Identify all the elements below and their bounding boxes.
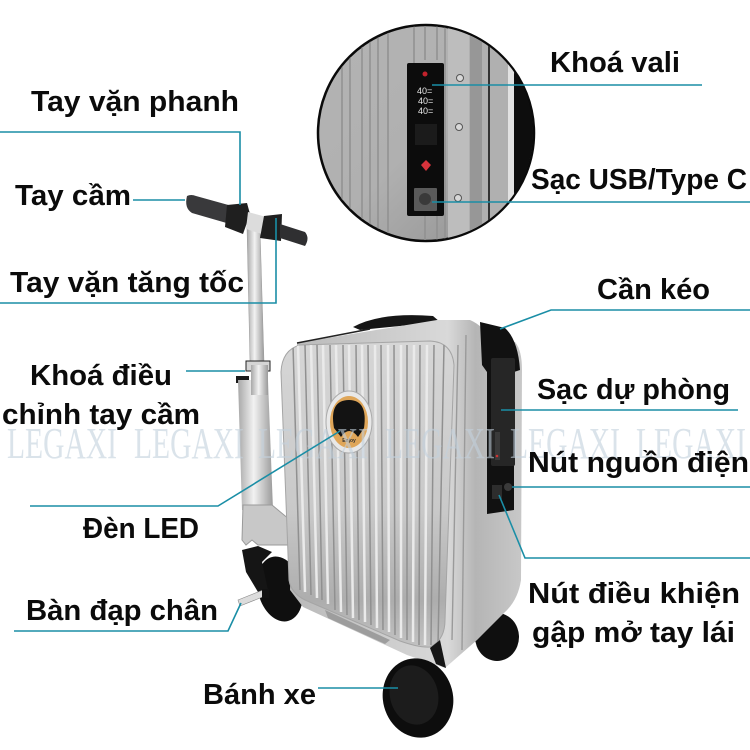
label: Khoá vali: Khoá vali (550, 47, 680, 79)
label: Sạc dự phòng: Sạc dự phòng (537, 374, 730, 406)
label: Bánh xe: Bánh xe (203, 679, 316, 711)
inset: lock close-up circle (318, 20, 538, 250)
label: Khoá điều chỉnh tay cầm (2, 360, 200, 431)
lock panel: 40= (418, 106, 433, 116)
power bank (491, 358, 515, 466)
label: Cần kéo: Cần kéo (597, 274, 710, 306)
label: Nút điều khiện gập mở tay lái: Nút điều khiện (528, 578, 740, 610)
suitcase top handle (353, 315, 440, 330)
foot pedal (238, 589, 269, 606)
watermark: LEGAXI: LEGAXI (258, 419, 368, 468)
lock panel: 40= (417, 86, 432, 96)
front wheel (374, 640, 462, 746)
luggage tray (325, 610, 390, 644)
label: Tay cầm: Tay cầm (15, 180, 131, 212)
left rear wheel and fender (242, 546, 309, 626)
LED badge: Enjoy (342, 438, 356, 444)
label: Tay vặn phanh: Tay vặn phanh (31, 86, 239, 118)
suitcase (281, 315, 522, 668)
label: Đèn LED: Đèn LED (83, 513, 199, 545)
label: Khoá điều chỉnh tay cầm: chỉnh tay cầm (2, 399, 200, 431)
label: Bàn đạp chân: Bàn đạp chân (26, 595, 218, 627)
telescopic handle housing (480, 322, 520, 514)
watermark: LEGAXI: LEGAXI (385, 419, 495, 468)
lock panel: 40= (418, 96, 433, 106)
LED badge (326, 391, 372, 453)
side buttons (492, 483, 512, 499)
right rear wheel (475, 613, 519, 661)
label: Nút nguồn điện: Nút nguồn điện (528, 447, 749, 479)
watermark: LEGAXI: LEGAXI (7, 419, 117, 468)
scooter handlebar and pole (186, 195, 308, 545)
label: Nút điều khiện gập mở tay lái: gập mở tay lái (532, 617, 735, 649)
watermark: LEGAXI: LEGAXI (510, 419, 620, 468)
label: Sạc USB/Type C: Sạc USB/Type C (531, 164, 747, 196)
label: Tay vặn tăng tốc: Tay vặn tăng tốc (10, 267, 244, 299)
watermark: LEGAXI (7, 419, 746, 468)
watermark: LEGAXI: LEGAXI (134, 419, 244, 468)
suitcase side shell (290, 320, 522, 668)
label: Nút điều khiện gập mở tay lái (528, 578, 740, 649)
label: Khoá điều chỉnh tay cầm: Khoá điều (30, 360, 172, 392)
lock panel (407, 63, 444, 216)
suitcase front panel (281, 341, 454, 647)
